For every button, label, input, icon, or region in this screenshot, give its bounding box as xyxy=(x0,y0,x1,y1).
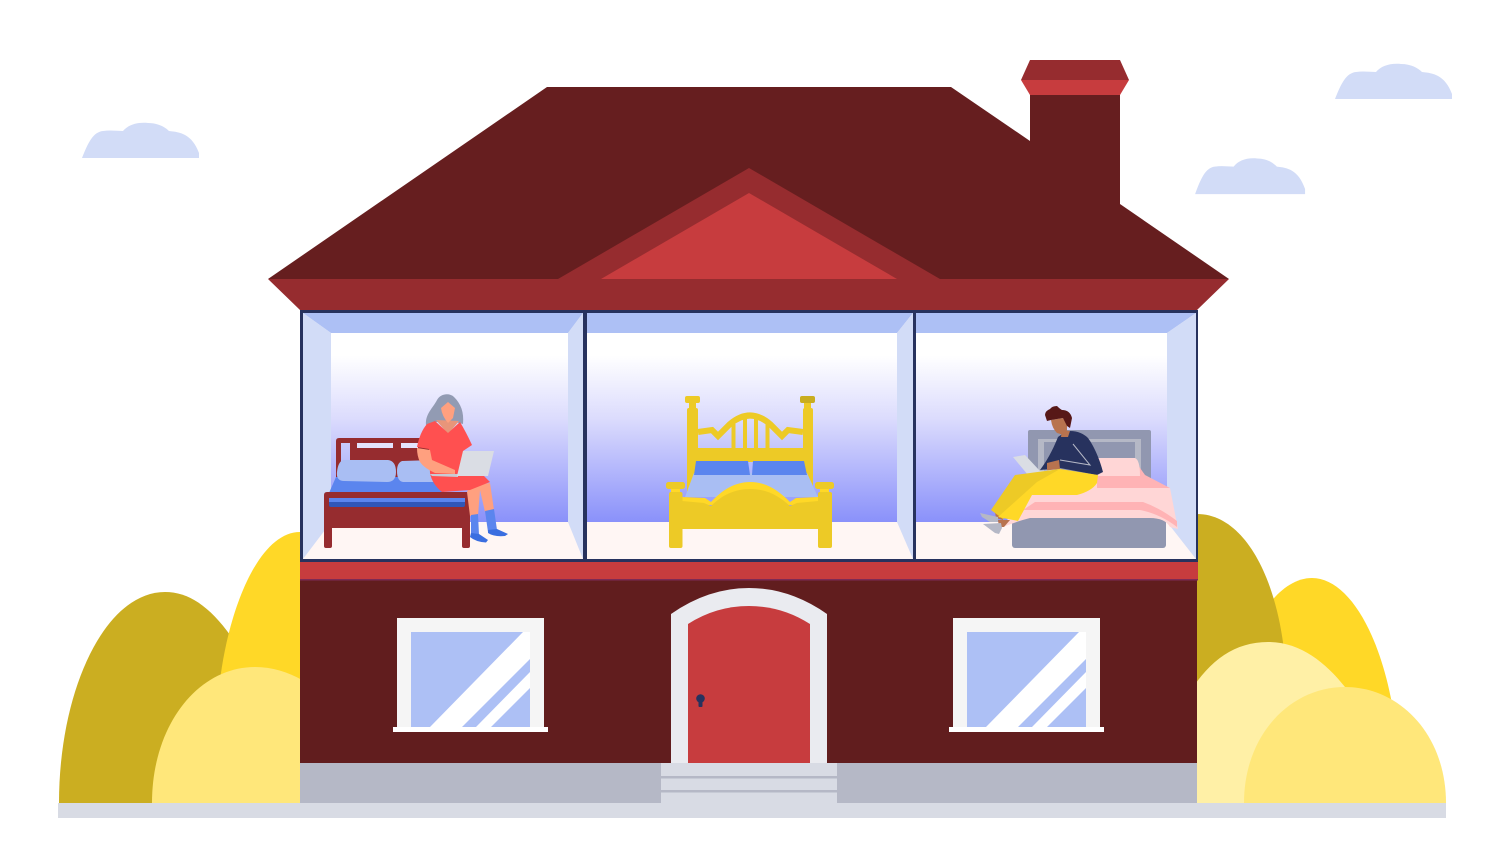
upper floor frame xyxy=(300,310,1198,562)
bed: yellow frame xyxy=(666,396,834,548)
cloud: top left xyxy=(82,123,199,158)
person: woman with laptop xyxy=(417,394,508,542)
icon: keyhole xyxy=(696,694,705,707)
room: middle bedroom xyxy=(587,313,913,559)
bushes: right xyxy=(1190,514,1446,803)
roof eave band xyxy=(268,279,1229,310)
roof gable xyxy=(558,168,940,279)
room: right bedroom xyxy=(916,313,1196,559)
foundation xyxy=(300,763,1197,803)
window: right xyxy=(949,618,1104,732)
roof with chimney xyxy=(268,87,1229,279)
door xyxy=(671,588,827,763)
person: man with laptop xyxy=(980,406,1103,534)
floor band xyxy=(300,562,1198,580)
room: left bedroom xyxy=(303,313,583,559)
ground strip xyxy=(58,803,1446,818)
cloud: top right xyxy=(1335,64,1452,99)
ground floor wall xyxy=(300,580,1197,764)
bushes: left xyxy=(59,532,310,803)
window: left xyxy=(393,618,548,732)
bed: red frame xyxy=(324,438,470,548)
chimney cap xyxy=(1021,60,1129,95)
front steps xyxy=(661,763,837,803)
cloud: middle right xyxy=(1195,158,1305,194)
bed: pink and grey xyxy=(1003,430,1178,548)
